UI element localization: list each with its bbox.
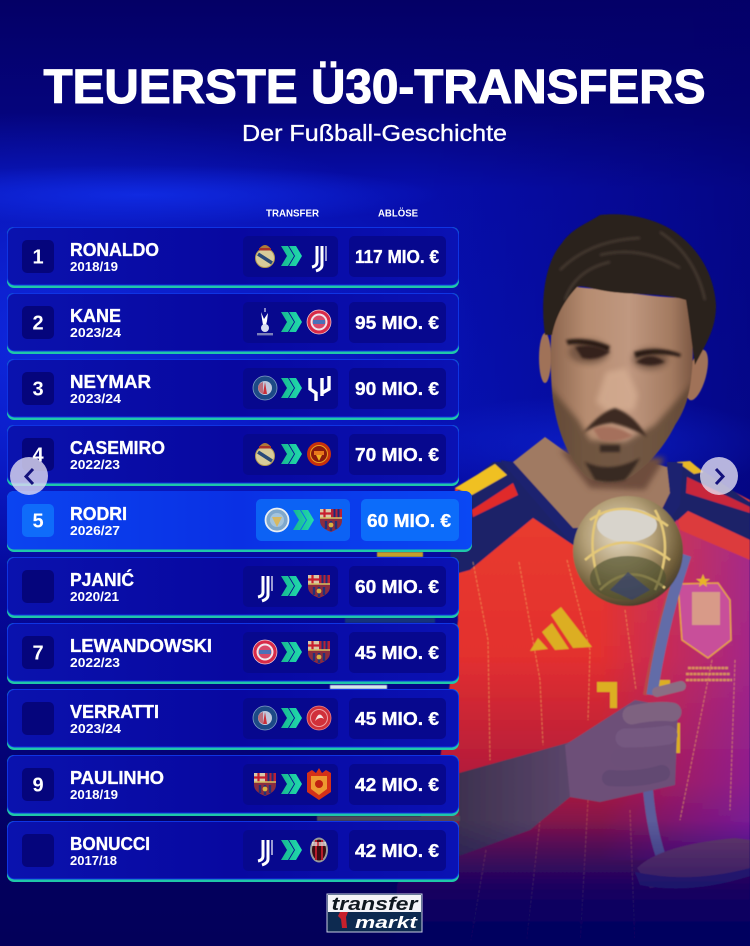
fee: 45 MIO. € [355, 709, 439, 729]
rank box, empty [22, 570, 54, 603]
transfer clubs [256, 499, 350, 541]
slivers visible between rows [317, 552, 460, 821]
fee: 42 MIO. € [355, 775, 439, 795]
season: 2022/23 [70, 656, 120, 670]
left carousel button [10, 457, 48, 495]
player name: PJANIĆ [70, 569, 134, 590]
purple tint on jersey [600, 520, 750, 860]
player name: VERRATTI [70, 702, 159, 722]
rank [22, 306, 54, 339]
trophy stem [635, 555, 750, 888]
row 8: Verratti [7, 689, 459, 750]
rank [22, 504, 54, 537]
rank: 2 [32, 312, 44, 334]
fee: 45 MIO. € [355, 643, 439, 663]
season: 2026/27 [70, 524, 120, 538]
subtitle: Der Fußball-Geschichte [242, 120, 507, 146]
player name: RODRI [70, 504, 127, 524]
transfer clubs [243, 830, 338, 871]
row 9: Paulinho [7, 755, 459, 816]
rank: 3 [32, 378, 44, 400]
stubble and facial shading [548, 340, 695, 490]
season: 2023/24 [70, 392, 121, 406]
crest [678, 574, 732, 680]
jersey torso [395, 462, 750, 946]
column header: transfer: TRANSFER [266, 208, 320, 220]
rank [22, 438, 54, 471]
fee: 95 MIO. € [355, 313, 439, 333]
hair [543, 214, 716, 365]
rank [22, 768, 54, 801]
season: 2020/21 [70, 590, 119, 604]
transfer clubs [243, 368, 338, 409]
trophy ball [573, 496, 683, 606]
rank: 5 [32, 510, 44, 532]
adidas logo [530, 607, 592, 651]
title: TEUERSTE Ü30-TRANSFERS [44, 61, 706, 114]
goatee [585, 445, 640, 482]
row 4: Casemiro [7, 425, 459, 486]
rank [22, 372, 54, 405]
hand [565, 686, 681, 802]
fee [349, 698, 446, 739]
fee: 60 MIO. € [355, 577, 439, 597]
transfer clubs [243, 566, 338, 607]
row 6: Pjanić [7, 557, 459, 618]
player name: KANE [70, 306, 121, 326]
player name: LEWANDOWSKI [70, 636, 212, 656]
row 7: Lewandowski [7, 623, 459, 684]
rank box, empty [22, 834, 54, 867]
eyes [575, 345, 665, 366]
shirt number [597, 680, 680, 753]
rank box, empty [22, 702, 54, 735]
player name: CASEMIRO [70, 438, 165, 458]
fade to background at bottom [390, 820, 750, 946]
transfer clubs [243, 764, 338, 805]
player name: BONUCCI [70, 834, 150, 854]
fee: 90 MIO. € [355, 379, 439, 399]
transfer clubs [243, 236, 338, 277]
fee: 70 MIO. € [355, 445, 439, 465]
player name: RONALDO [70, 240, 159, 260]
transfermarkt logo [327, 894, 422, 932]
row 10: Bonucci [7, 821, 459, 882]
transfer clubs [243, 632, 338, 673]
player name: NEYMAR [70, 372, 151, 392]
rank: 4 [32, 444, 44, 466]
player name: PAULINHO [70, 768, 164, 788]
fee [349, 434, 446, 475]
fee [349, 632, 446, 673]
fee [349, 236, 446, 277]
ears [539, 333, 712, 402]
rank: 7 [32, 642, 44, 664]
collar [500, 460, 683, 545]
fee [349, 764, 446, 805]
fee: 60 MIO. € [367, 511, 451, 531]
column header: ablöse: ABLÖSE [378, 206, 418, 220]
right carousel button [700, 457, 738, 495]
fee [349, 566, 446, 607]
transfer clubs [243, 698, 338, 739]
season: 2017/18 [70, 854, 117, 868]
fee: 42 MIO. € [355, 841, 439, 861]
row 2: Kane [7, 293, 459, 354]
neck [513, 437, 670, 530]
rank [22, 636, 54, 669]
transfer clubs [243, 302, 338, 343]
shirt pinstripes [470, 560, 735, 946]
row 1: Ronaldo [7, 227, 459, 288]
rank: 9 [32, 774, 44, 796]
fee [349, 302, 446, 343]
season: 2018/19 [70, 260, 118, 274]
row 5: Rodri (highlighted) [7, 491, 472, 552]
eyebrows [566, 339, 681, 358]
fee [349, 368, 446, 409]
fee [349, 830, 446, 871]
navy shoulder and collar panels [446, 461, 750, 575]
face [551, 287, 693, 483]
player photo: Rodri with trophy [317, 214, 750, 946]
fee [361, 499, 459, 541]
hair highlights [560, 232, 705, 300]
season: 2018/19 [70, 788, 118, 802]
forearm [459, 730, 630, 856]
season: 2022/23 [70, 458, 120, 472]
moustache [583, 408, 647, 437]
row 3: Neymar [7, 359, 459, 420]
season: 2023/24 [70, 326, 121, 340]
rank: 1 [32, 246, 44, 268]
fee: 117 MIO. € [355, 247, 439, 267]
neck shadow [560, 450, 665, 490]
rank [22, 240, 54, 273]
lips [593, 427, 633, 441]
season: 2023/24 [70, 722, 121, 736]
transfermarkt logo: markt [355, 913, 419, 932]
transfermarkt logo: transfer [332, 894, 419, 914]
transfer clubs [243, 434, 338, 475]
